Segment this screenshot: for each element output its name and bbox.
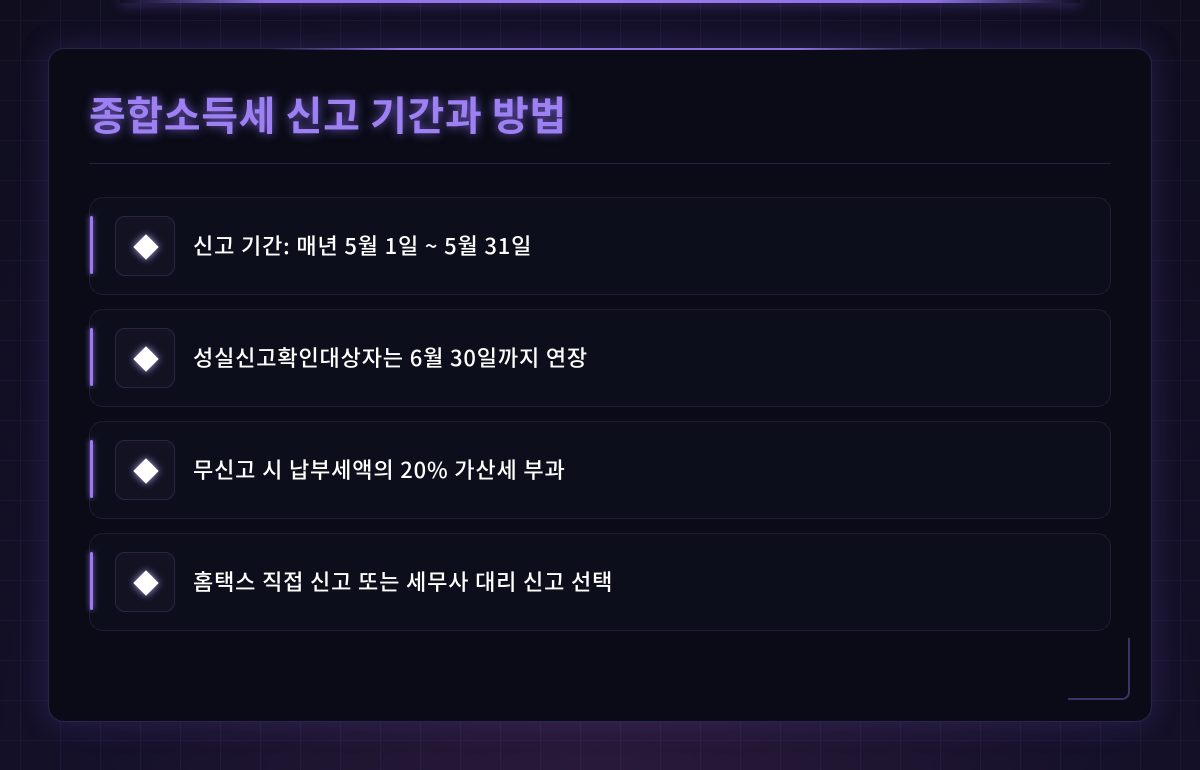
icon: diamond [115,328,175,388]
title: 종합소득세 신고 기간과 방법 [89,84,567,142]
item 4 [89,533,1111,631]
icon: diamond [115,440,175,500]
item 2 [89,309,1111,407]
text: 무신고 시 납부세액의 20% 가산세 부과 [193,453,566,485]
text: 홈택스 직접 신고 또는 세무사 대리 신고 선택 [193,565,613,597]
icon: diamond [115,552,175,612]
icon: diamond [115,216,175,276]
text: 성실신고확인대상자는 6월 30일까지 연장 [193,341,588,373]
item 1 [89,197,1111,295]
text: 신고 기간: 매년 5월 1일 ~ 5월 31일 [193,229,532,261]
item 3 [89,421,1111,519]
